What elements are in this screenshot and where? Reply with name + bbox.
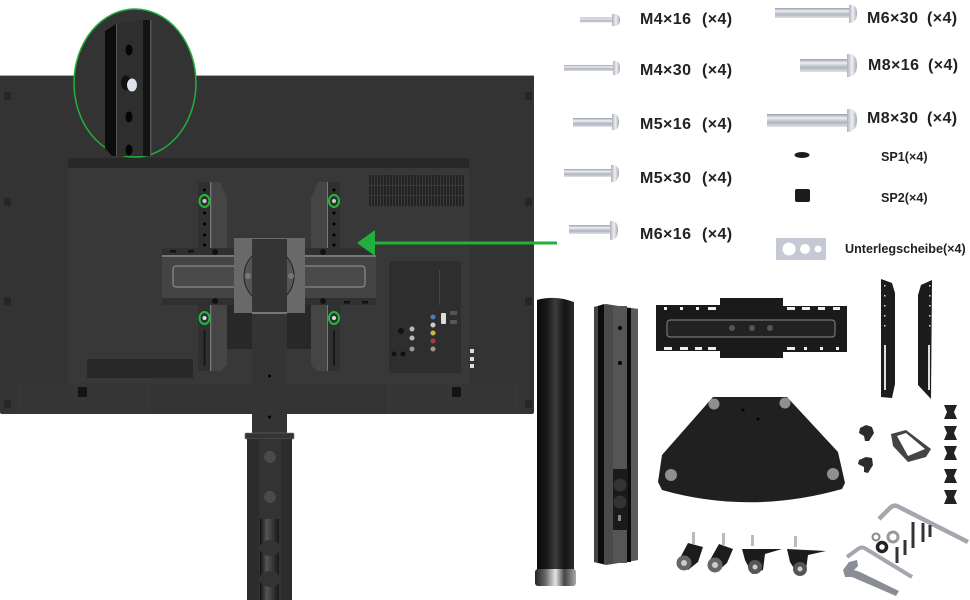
label M4×30: M4×30 [640, 62, 691, 79]
label M5×16: M5×16 [640, 116, 691, 133]
universal mounting plate [656, 298, 847, 358]
green arrow [357, 230, 557, 256]
screw M4×16 [580, 14, 620, 26]
label M5×30: (×4) [702, 170, 732, 187]
label M6×30: M6×30 [867, 10, 918, 27]
horizontal mounting plate [162, 248, 376, 305]
screw M5×30 [564, 165, 619, 182]
screw M6×30 [775, 5, 857, 23]
base plate [658, 397, 845, 502]
left vertical TV bracket [198, 182, 227, 371]
stand upper column [252, 239, 287, 434]
caster wheels [676, 532, 826, 576]
spacer spools [944, 405, 957, 504]
label M8×16: M8×16 [868, 57, 919, 74]
magnified detail circle [74, 9, 196, 157]
TV back panel [0, 75, 534, 414]
label M4×16: (×4) [702, 11, 732, 28]
label M4×30: (×4) [702, 62, 732, 79]
screw M8×30 [767, 109, 857, 132]
label M5×30: M5×30 [640, 170, 691, 187]
label M4×16: M4×16 [640, 11, 691, 28]
hardware tools [843, 506, 968, 596]
TV connector panel [389, 261, 474, 373]
label M6×16: M6×16 [640, 226, 691, 243]
washer plate [776, 238, 826, 260]
mounting shadow behind bracket [227, 300, 311, 349]
screw M5×16 [573, 114, 619, 130]
spacer SP1 [794, 152, 810, 158]
label M6×30: (×4) [927, 10, 958, 27]
screw M8×16 [800, 54, 857, 77]
label SP2: SP2(×4) [881, 191, 928, 205]
label M6×16: (×4) [702, 226, 732, 243]
TV vent grille [368, 175, 464, 206]
label M5×16: (×4) [702, 116, 732, 133]
stand collar and lower column [245, 433, 294, 600]
knobs and handle bracket [858, 425, 931, 473]
round tube column [535, 298, 576, 586]
label M8×30: M8×30 [867, 110, 918, 127]
label M8×30: (×4) [927, 110, 958, 127]
screw M6×16 [569, 221, 618, 240]
label Unterlegscheibe: Unterlegscheibe(×4) [845, 242, 966, 256]
screw M4×30 [564, 61, 620, 75]
central stand head plate [234, 238, 305, 313]
label M8×16: (×4) [928, 57, 958, 74]
right vertical TV bracket [311, 182, 340, 371]
column with power outlets [594, 304, 638, 565]
green screw markers [200, 195, 339, 324]
label SP1: SP1(×4) [881, 150, 928, 164]
spacer SP2 [795, 189, 810, 202]
thin TV brackets [881, 279, 932, 399]
